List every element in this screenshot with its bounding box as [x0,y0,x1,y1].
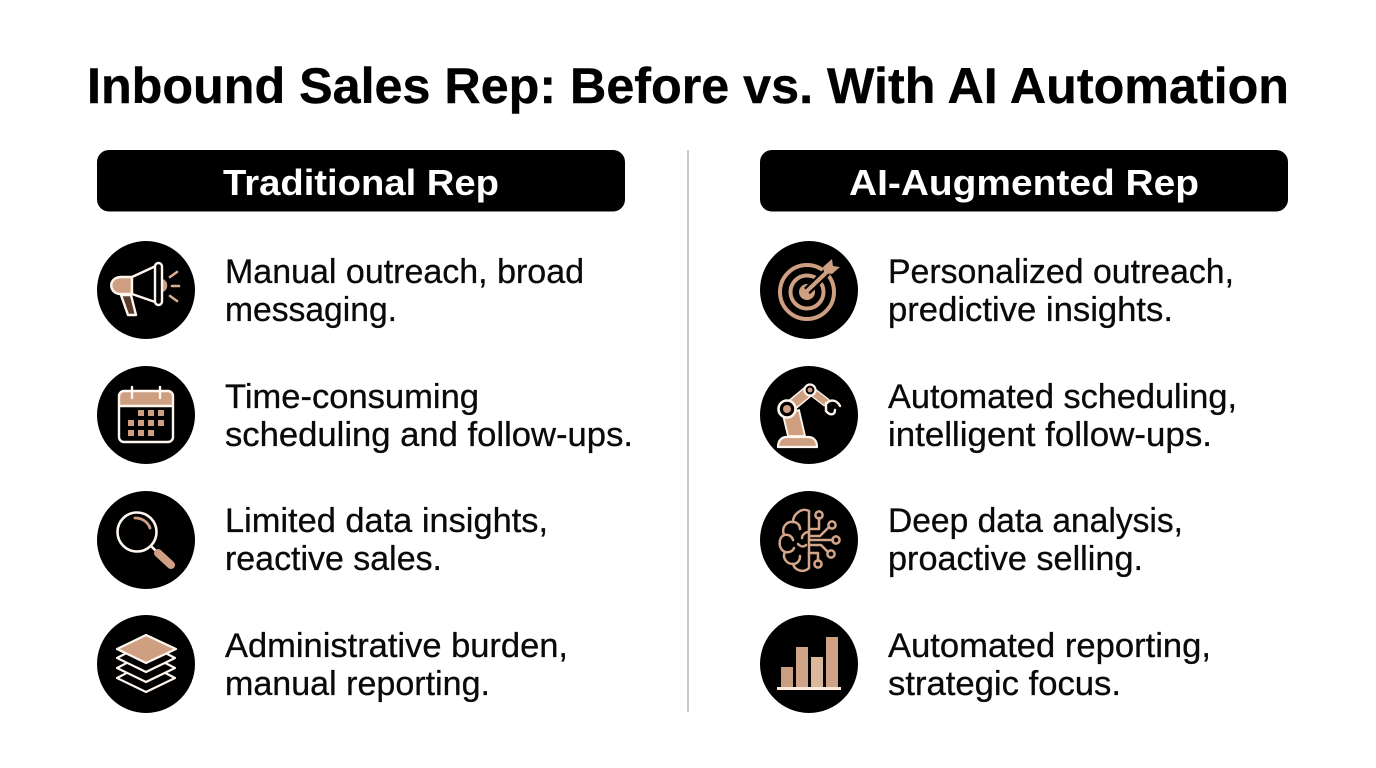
text: personalized outreach: Personalized outreach, [888,253,1234,291]
text: time-consuming [225,378,633,454]
title: Inbound Sales Rep: Before vs. With AI Automation [87,58,1289,114]
text: administrative burden [225,627,568,703]
text: automated reporting: Automated reporting, [888,627,1211,665]
heading: traditional rep [97,150,625,212]
text: manual outreach: Manual outreach, broad [225,253,584,291]
text: administrative burden: Administrative burden, [225,627,568,665]
text: deep data analysis: proactive selling. [888,540,1143,578]
text: limited data [225,502,548,578]
icon: layers [97,615,195,713]
text: automated scheduling: intelligent follow-ups. [888,416,1212,454]
text: automated reporting [888,627,1211,703]
panel: ai-augmented rep [760,150,1288,713]
text: manual outreach [225,253,584,329]
text: automated reporting: strategic focus. [888,665,1121,703]
text: manual outreach: messaging. [225,291,397,329]
icon: target [760,241,858,339]
text: deep data analysis [888,502,1183,578]
text: administrative burden: manual reporting. [225,665,490,703]
text: personalized outreach: predictive insights. [888,291,1173,329]
icon: calendar [97,366,195,464]
heading: traditional rep: Traditional Rep [223,162,499,203]
heading: ai-augmented rep: AI-Augmented Rep [849,162,1199,203]
icon: megaphone [97,241,195,339]
text: limited data: reactive sales. [225,540,442,578]
text: deep data analysis: Deep data analysis, [888,502,1183,540]
text: automated scheduling [888,378,1237,454]
panel: traditional rep [97,150,633,713]
icon: robotic arm [760,366,858,464]
text: time-consuming: Time-consuming [225,378,479,416]
text: time-consuming: scheduling and follow-ups. [225,416,633,454]
text: personalized outreach [888,253,1234,329]
icon: bar chart [760,615,858,713]
heading: ai-augmented rep [760,150,1288,212]
icon: magnifying glass [97,491,195,589]
text: automated scheduling: Automated scheduling, [888,378,1237,416]
text: limited data: Limited data insights, [225,502,548,540]
icon: ai brain [760,491,858,589]
